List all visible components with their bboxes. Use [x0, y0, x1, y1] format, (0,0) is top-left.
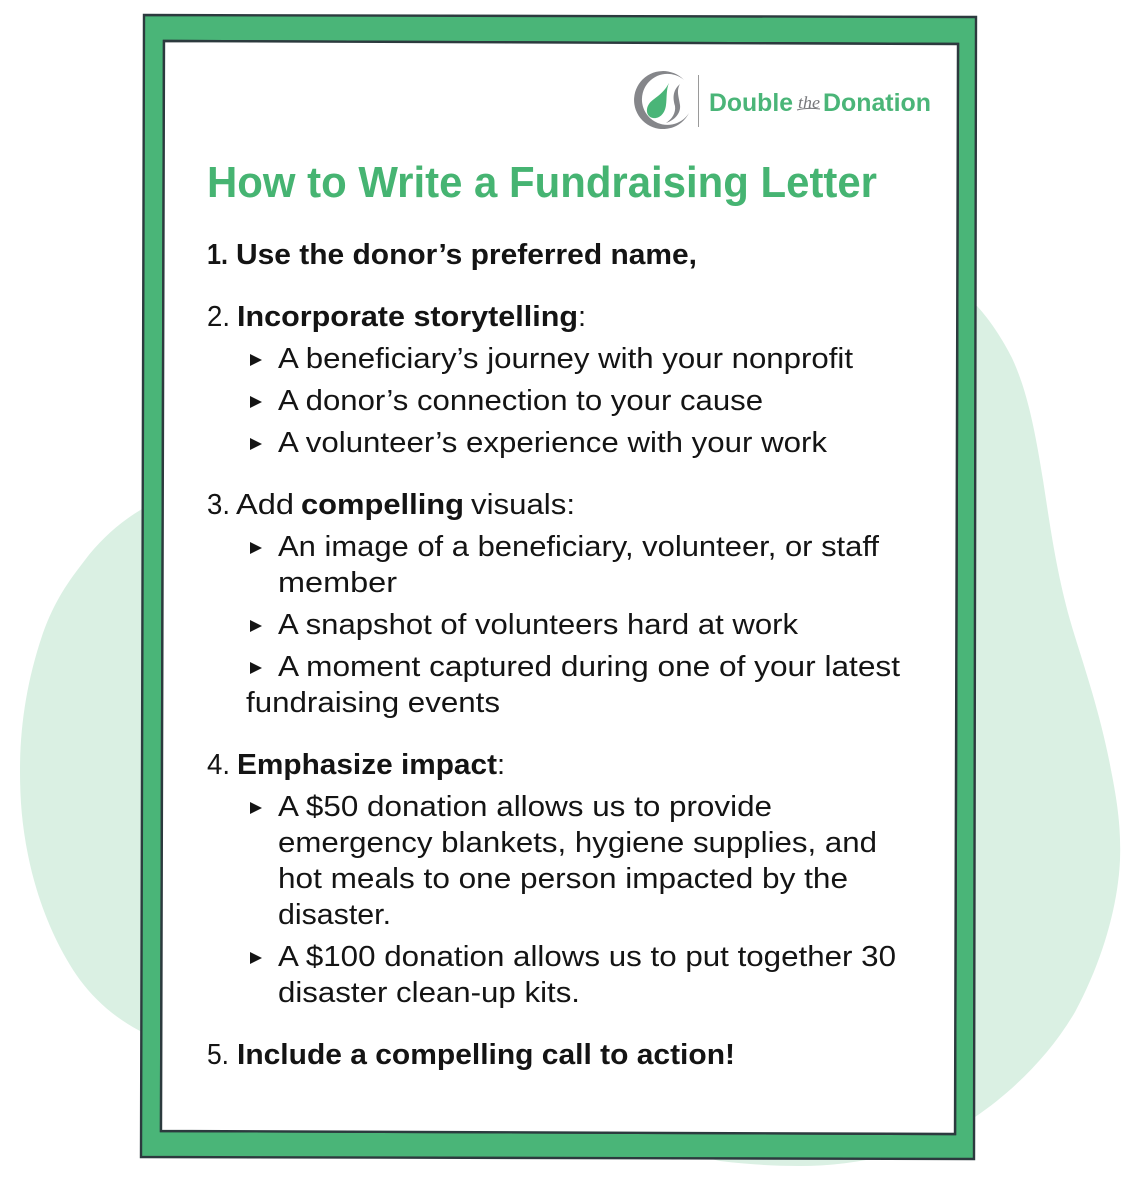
step 3 heading: 3. [207, 489, 230, 521]
step 2 bullets: A volunteer’s experience with your work [278, 427, 828, 459]
letter frame [141, 15, 976, 1159]
logo wordmark [709, 89, 931, 117]
step 4 heading: 4. [207, 749, 230, 781]
step 4 bullets [250, 791, 896, 1009]
step 3 heading: compelling [301, 489, 464, 521]
step 2 heading: 2. [207, 301, 230, 333]
step 5: 5. [207, 1039, 229, 1071]
logo divider [698, 75, 699, 127]
step 4 bullets: emergency blankets, hygiene supplies, and [278, 827, 877, 859]
letter page [161, 41, 958, 1134]
step 3 bullets: A moment captured during one of your latest [278, 651, 900, 683]
logo: Double the Donation [634, 71, 931, 129]
step 4 bullets: hot meals to one person impacted by the [278, 863, 848, 895]
step 4 heading: : [497, 749, 505, 781]
logo wordmark: Donation [823, 89, 931, 117]
step 4 bullets: disaster clean-up kits. [278, 977, 580, 1009]
step 2 heading: : [578, 301, 586, 333]
step 1: 1. [207, 239, 228, 271]
step 3 bullets [246, 531, 900, 719]
logo wordmark: Double [709, 89, 793, 117]
title: How to Write a Fundraising Letter [207, 158, 877, 207]
step 4 heading: Emphasize impact [237, 749, 497, 781]
step 3 bullets: fundraising events [246, 687, 500, 719]
step 3 heading: Add [236, 489, 294, 521]
step 3 bullets: A snapshot of volunteers hard at work [278, 609, 799, 641]
step 3 heading [207, 489, 575, 521]
step 4 bullets: A $50 donation allows us to provide [278, 791, 772, 823]
step 2 heading: Incorporate storytelling [237, 301, 578, 333]
step 3 bullets: member [278, 567, 397, 599]
step 3 heading: visuals: [471, 489, 575, 521]
step 2 bullets: A beneficiary’s journey with your nonprofit [278, 343, 853, 375]
background blob [20, 306, 1120, 1166]
step 1: Use the donor’s preferred name, [236, 239, 697, 271]
logo icon [634, 71, 689, 129]
step 5: Include a compelling call to action! [237, 1039, 735, 1071]
step 2 bullets [250, 343, 853, 459]
step 3 bullets: An image of a beneficiary, volunteer, or staff [278, 531, 880, 563]
step 4 bullets: A $100 donation allows us to put together 30 [278, 941, 896, 973]
step 4 bullets: disaster. [278, 899, 391, 931]
logo wordmark: the [798, 93, 820, 112]
step 2 bullets: A donor’s connection to your cause [278, 385, 763, 417]
